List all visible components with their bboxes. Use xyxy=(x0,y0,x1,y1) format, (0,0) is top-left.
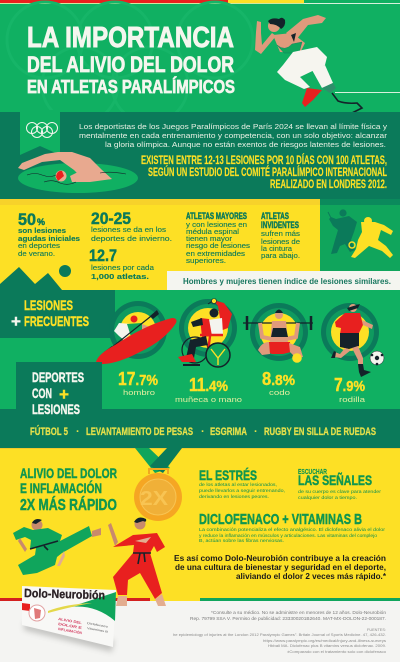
heading: frequent injuries: FRECUENTES xyxy=(24,313,89,329)
text: diclofenac and vitamins: La combinación potencializa el efecto analgésico. El diclofenaco alivia el dolor xyxy=(199,527,386,532)
percent: wrist or hand xyxy=(175,375,242,404)
text: stress xyxy=(199,467,285,499)
stat: 50 percent: en deportes xyxy=(18,241,60,250)
icon: medal xyxy=(134,448,182,521)
text: diclofenac and vitamins: B, actúan sobre las fibras nerviosas. xyxy=(199,538,284,543)
footer legal text: Rep. 79799 SSA V. Permiso de publicidad: 233300201B2640. MAT-MX-DOLON-22-000187. xyxy=(190,616,386,621)
icon: paralympic runner xyxy=(255,15,362,114)
stat: 12.7: 1,000 atletas. xyxy=(91,272,149,281)
stat: 12.7: 12.7 xyxy=(89,246,117,265)
footer sources: he epidemiology of injuries at the London 2012 Paralympic Games". Britain Journal of Sports Medicine. 47, 426-432. xyxy=(173,632,386,637)
heading: sports with more injuries: DEPORTES xyxy=(32,369,84,385)
stat: 12.7 xyxy=(89,246,155,281)
footer legal text xyxy=(190,610,387,621)
icon: product box: INFLAMACIÓN xyxy=(58,626,83,635)
heading: sports with more injuries: + xyxy=(59,385,69,404)
icon: product box: DOLOR E xyxy=(58,622,83,630)
title: DEL ALIVIO DEL DOLOR xyxy=(27,52,234,77)
footer legal text: *Consulte a su médico. No se administre en menores de 12 años. Dolo-Neurobión xyxy=(211,610,387,615)
footer sources xyxy=(173,627,386,654)
heading: pain relief: E INFLAMACIÓN xyxy=(20,479,102,496)
heading: pain relief: ALIVIO DEL DOLOR xyxy=(20,465,117,481)
footer sources: ±Comparado con el tratamiento solo con diclofenaco xyxy=(287,649,386,654)
text: listen to the signals: cualquier dolor a tiempo. xyxy=(298,495,357,500)
note: men and women: Hombres y mujeres tienen índice de lesiones similares. xyxy=(183,277,391,286)
title xyxy=(27,22,235,97)
title: LA IMPORTANCIA xyxy=(27,22,234,54)
percent: knee: 7.9% xyxy=(334,375,365,395)
icon: football player xyxy=(321,303,384,377)
percent: wrist or hand: muñeca o mano xyxy=(175,395,242,404)
icon: kayak athlete xyxy=(96,301,176,364)
stat: 50 percent xyxy=(18,210,80,258)
icon: wheelchair athlete xyxy=(178,298,237,367)
icon: karate athlete in green xyxy=(13,519,101,575)
text: stress: EL ESTRÉS xyxy=(199,467,257,483)
sports list xyxy=(30,425,376,438)
panel: pain relief xyxy=(0,448,400,598)
heading: pain relief: 2X MÁS RÁPIDO xyxy=(20,495,117,514)
icon: product box: Diclofenaco xyxy=(87,621,109,629)
percent: knee xyxy=(334,375,366,404)
footer sources: https://www.paralympic.org/es/medical/injury-and-illness-surveys xyxy=(263,638,386,643)
panel: statistics xyxy=(0,199,400,290)
icon: product box: Dolo-Neurobión xyxy=(24,586,105,602)
text: stress: de los atletas al estar lesionados, xyxy=(199,482,277,487)
icon: yellow tennis player xyxy=(349,217,393,258)
sports list: FÚTBOL 5 xyxy=(30,425,68,438)
sports list: LEVANTAMIENTO DE PESAS xyxy=(86,426,193,438)
heading: sports with more injuries: CON xyxy=(32,385,52,401)
percent: shoulder: 17.7% xyxy=(118,369,158,389)
heading: frequent injuries xyxy=(11,297,89,331)
heading: sports with more injuries xyxy=(32,369,84,417)
note: blind athletes: INVIDENTES xyxy=(261,220,299,230)
note: older athletes: en extremidades xyxy=(186,249,245,258)
text: diclofenac and vitamins xyxy=(199,511,386,543)
panel: sports with most injuries xyxy=(0,362,400,448)
sports list: · xyxy=(254,426,258,438)
note: blind athletes: para abajo. xyxy=(261,251,300,260)
highlighted study statistic xyxy=(141,154,387,191)
sports list: · xyxy=(201,426,205,438)
icon: product box xyxy=(22,586,116,652)
icon: swimmer xyxy=(18,152,138,193)
closing statement: aliviando el dolor 2 veces más rápido.* xyxy=(236,572,387,581)
note: older athletes: ATLETAS MAYORES xyxy=(186,211,247,221)
text: stress: puede llevarlos a seguir entrenando, xyxy=(199,488,285,493)
note: older athletes: médula espinal xyxy=(186,227,239,236)
note: blind athletes: ATLETAS xyxy=(261,211,289,221)
color strip and footer background xyxy=(0,598,400,662)
decoration: mountains and sun xyxy=(0,265,71,290)
text: listen to the signals: de su cuerpo es clave para atender xyxy=(298,489,382,494)
icon: fencer silhouette xyxy=(328,209,357,254)
sports list: · xyxy=(76,426,80,438)
text: listen to the signals: LAS SEÑALES xyxy=(298,471,372,488)
note: men and women xyxy=(167,271,400,290)
heading: frequent injuries: LESIONES xyxy=(24,297,73,313)
intro paragraph: la gloria olímpica. Aunque no están exentos de riesgos latentes de lesiones. xyxy=(105,140,386,149)
icon: red karate athlete xyxy=(108,518,166,606)
intro paragraph: Los deportistas de los Juegos Paralímpicos de París 2024 se llevan al límite física y xyxy=(79,122,387,131)
percent: elbow: 8.8% xyxy=(262,369,295,389)
note: blind athletes: sufren más xyxy=(261,229,300,238)
closing statement: Es así como Dolo-Neurobión contribuye a la creación xyxy=(174,554,386,563)
note: blind athletes: la cintura xyxy=(261,244,293,253)
icon: medal: 2X xyxy=(140,488,169,510)
stat: 50 percent: son lesiones xyxy=(18,226,66,235)
closing statement xyxy=(174,554,387,581)
stat: 20-25 xyxy=(91,209,172,243)
heading: frequent injuries: + xyxy=(11,312,21,331)
note: older athletes: superiores. xyxy=(186,256,226,265)
note: blind athletes xyxy=(261,211,300,260)
panel: frequent injuries xyxy=(0,290,400,409)
stat: 50 percent: % xyxy=(37,217,45,227)
footer sources: FUENTES: xyxy=(367,627,386,632)
percent: elbow: codo xyxy=(269,388,290,397)
text: listen to the signals: ESCUCHAR xyxy=(298,469,327,476)
closing statement: de una cultura de bienestar y seguridad en el deporte, xyxy=(175,563,386,572)
heading: sports with more injuries: LESIONES xyxy=(32,401,80,417)
stat: 20-25: 20-25 xyxy=(91,209,131,228)
sports list: ESGRIMA xyxy=(210,426,247,438)
text: diclofenac and vitamins: y reduce la inflamación en músculos y articulaciones. Las vitaminas del complejo xyxy=(199,533,378,538)
stat: 50 percent: de verano. xyxy=(18,249,55,258)
stat: 50 percent: 50 xyxy=(18,210,36,229)
note: older athletes: tienen mayor xyxy=(186,234,233,243)
intro paragraph: mentalmente en cada entrenamiento y competencia, con un solo objetivo: alcanzar xyxy=(79,131,388,140)
note: older athletes xyxy=(186,211,250,265)
text: listen to the signals xyxy=(298,469,382,500)
stat: 12.7: lesiones por cada xyxy=(91,263,155,272)
percent: knee: rodilla xyxy=(339,395,366,404)
heading: pain relief xyxy=(20,465,117,514)
ribbon with rings xyxy=(20,110,60,155)
note: older athletes: y con lesiones en xyxy=(186,220,247,229)
percent: shoulder xyxy=(118,369,158,397)
icon: product box: Vitaminas B xyxy=(87,626,108,634)
icon: weightlifter xyxy=(243,303,313,363)
title: EN ATLETAS PARALÍMPICOS xyxy=(27,76,235,97)
header panel xyxy=(0,0,400,123)
icon: product box: ALIVIO DEL xyxy=(58,617,83,625)
percent: shoulder: hombro xyxy=(123,388,155,397)
stat: 50 percent: agudas iniciales xyxy=(18,234,80,243)
text: stress: derivando en lesiones peores. xyxy=(199,494,269,499)
stat: 20-25: deportes de invierno. xyxy=(91,234,172,243)
panel: introduction xyxy=(0,110,400,200)
intro paragraph xyxy=(79,122,388,149)
stat: 20-25: lesiones se da en los xyxy=(91,225,166,234)
footer sources: Hbbali MA. Diclofenac plus B vitamins versus diclofenac. 2009. xyxy=(268,643,386,648)
percent: wrist or hand: 11.4% xyxy=(189,375,228,395)
percent: elbow xyxy=(262,369,295,397)
note: older athletes: riesgo de lesiones xyxy=(186,241,250,250)
note: blind athletes: lesiones de xyxy=(261,237,300,246)
